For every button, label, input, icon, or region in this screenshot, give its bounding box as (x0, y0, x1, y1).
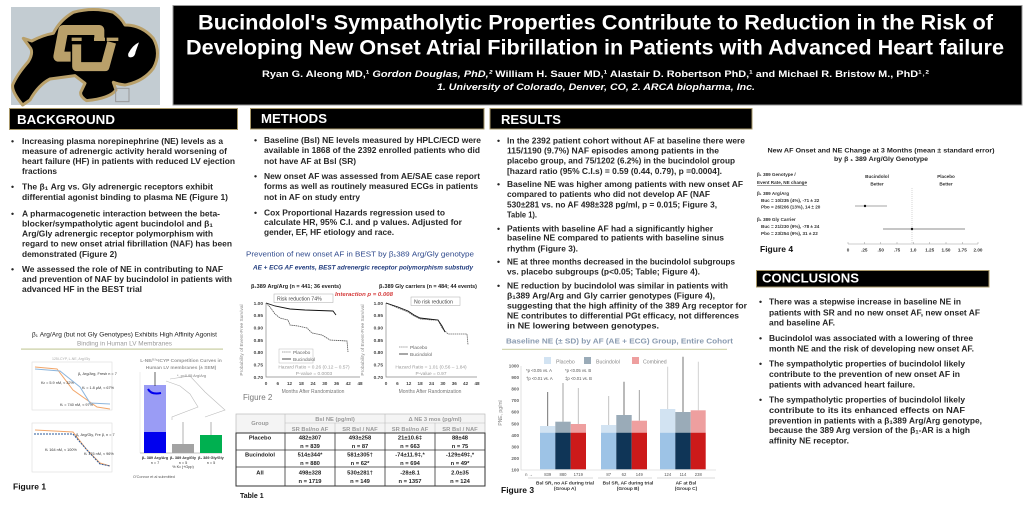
plot: Gly carriers survival: 1.00 (374, 301, 383, 307)
plot: Arg/Arg survival: 0 (265, 381, 268, 386)
plot: Gly carriers survival: Placebo (410, 345, 428, 351)
plot: Gly carriers survival: 36 (452, 381, 457, 386)
results bullets: • (497, 136, 500, 146)
plot: Arg/Arg survival: 36 (334, 381, 339, 386)
competition curve plot: upper: Kₗ = 740 nM, ≈ 97% (60, 403, 94, 407)
background bullets: • (11, 208, 14, 218)
table 1: 530±281† (347, 470, 373, 476)
panel: results (490, 108, 752, 331)
table 1: n = 149 (350, 479, 371, 485)
plot: Gly carriers survival: 6 (396, 381, 399, 386)
p-value notes: ‡p <0.01 vs. B (565, 376, 592, 381)
results bullets (497, 136, 748, 331)
high affinity bar chart (133, 358, 225, 479)
background bullets: Increasing plasma norepinephrine (NE) levels as a (22, 136, 223, 146)
background bullets: The β₁ Arg vs. Gly adrenergic receptors exhibit (22, 182, 213, 192)
results bullets: 115/1190 (9.7%) NAF episodes among patients in the (507, 146, 719, 156)
y axis (498, 364, 716, 472)
n row and group labels: 62 (622, 472, 627, 477)
plot: Gly carriers survival: 48 (474, 381, 480, 386)
results bullets: NE contributes to differential PGt efficacy, not differences (507, 311, 739, 321)
table 1 label: Table 1 (240, 493, 264, 500)
y axis: 100 (511, 468, 519, 472)
y axis: 400 (511, 433, 519, 438)
methods bullets: • (254, 208, 257, 218)
figure 4: forest plot (757, 148, 994, 252)
y axis: 200 (511, 456, 519, 461)
competition curve plot: upper: Kₕ = 5.9 nM, ≈ 32% (41, 381, 74, 385)
forest plot chart: 0 (847, 248, 850, 252)
results bullets: • (497, 223, 500, 233)
logo: CU buffalo (11, 7, 160, 105)
results bullets: 530±281 vs. no AF 498±328 pg/ml, p = 0.015; Figure 3, (507, 199, 717, 209)
results bullets: Patients with baseline AF had a significantly higher (507, 223, 714, 233)
y axis: PNE, pg/ml (498, 400, 504, 426)
forest plot labels: Better (939, 182, 953, 186)
group A bars (540, 422, 586, 469)
table 1: All (256, 470, 264, 476)
plot: Arg/Arg survival (239, 284, 363, 395)
plot: Arg/Arg survival: 0.90 (254, 326, 263, 332)
table 1: n = 694 (400, 461, 421, 467)
figure 3 legend: Combined (643, 360, 667, 366)
competition curve plot: lower: Kₗ 164 nM, ≈ 100% (45, 448, 77, 452)
background bullets: differential agonist binding to plasma NE (Figure 1) (22, 192, 228, 202)
plot: Arg/Arg survival: 1.00 (254, 301, 263, 307)
methods bullets: • (254, 135, 257, 145)
table 1: n = 1719 (298, 479, 322, 485)
conclusions bullets: The sympatholytic properties of bucindolol likely (769, 395, 965, 405)
y axis: 1000 (509, 364, 519, 368)
conclusions bullets: Bucindolol was associated with a lowering of three (769, 333, 973, 343)
forest plot labels: β₁ 389 Genotype / (757, 172, 796, 177)
high affinity bar chart: Human LV membranes (± SEM) (146, 365, 217, 371)
figure 2 title (246, 250, 474, 272)
figure 4 title (768, 148, 994, 163)
forest plot labels: Placebo (937, 174, 955, 179)
conclusions bullets: patients with SR and no new onset AF, new onset AF (769, 307, 980, 317)
table 1: 21±10.6‡ (398, 436, 422, 442)
n row and group labels (525, 472, 715, 492)
plot: Gly carriers survival: β₁389 Gly carriers (n = 484; 44 events) (379, 284, 477, 290)
background bullets: We assessed the role of NE in contributing to NAF (22, 264, 223, 274)
plot: Gly carriers survival: 0.90 (374, 326, 383, 332)
high affinity bar chart: β₁ 389 Arg/Arg (142, 456, 169, 460)
table 1: Δ NE 3 mos (pg/ml) (408, 417, 462, 423)
n row and group labels: Bsl SR, AF during trial (603, 480, 653, 486)
plot: Gly carriers survival: Hazard Ratio = 1.01 (0.56 – 1.84) (395, 364, 467, 370)
plot: Gly carriers survival: Probability of Event-Free Survival (360, 304, 366, 376)
high affinity bar chart: *, p<0.05 Arg/Arg (177, 374, 206, 378)
conclusions bullets: There was a stepwise increase in baseline NE in (769, 297, 961, 307)
figure 3: baseline NE bar chart (498, 336, 734, 492)
competition curve plot: upper (32, 357, 117, 410)
forest plot labels: Event Rate, NE change (757, 180, 807, 185)
p-value notes: †p <0.01 vs. A (526, 376, 553, 381)
forest plot chart: .50 (878, 248, 884, 252)
table 1 (236, 414, 485, 486)
plot: Arg/Arg survival: 0.80 (254, 350, 263, 356)
table 1: SR Bsl/no AF (292, 427, 329, 433)
plot: Gly carriers survival: 0.75 (374, 362, 383, 368)
forest plot chart: 1.75 (958, 248, 967, 252)
table 1: n = 49* (451, 461, 470, 467)
forest plot chart: .75 (894, 248, 901, 252)
background bullets: • (11, 264, 14, 274)
background bullets: A pharmacogenetic interaction between the beta- (22, 208, 220, 218)
figure 2: survival curves (239, 250, 480, 402)
table 1: 493±258 (349, 436, 372, 442)
results bullets: [hazard ratio (95% C.I.s) = 0.59 (0.44, 0.79), p =0.0004]. (507, 166, 722, 176)
background bullets: Arg/Gly adrenergic receptor polymorphism with (22, 228, 213, 238)
panel: methods (250, 108, 484, 237)
n row and group labels: (Group A) (554, 486, 577, 492)
plot: Arg/Arg survival: 0.75 (254, 362, 263, 368)
heading: results (490, 108, 752, 129)
table 1: 581±305† (347, 452, 373, 458)
competition curve plot: lower: Kₗ 176 nM, ≈ 96% (84, 452, 114, 456)
forest plot chart: 1.50 (942, 248, 951, 252)
plot: Gly carriers survival: 0.70 (374, 375, 383, 381)
forest plot chart: 1.25 (925, 248, 935, 252)
heading: conclusions: CONCLUSIONS (762, 270, 859, 286)
table 1: n = 62* (351, 461, 370, 467)
figure 3 title: Baseline NE (± SD) by AF (AE + ECG) Group, Entire Cohort (506, 336, 734, 346)
results bullets: NE reduction by bucindolol was similar in patients with (507, 281, 728, 291)
table 1: SR Bsl / NAF (442, 427, 478, 433)
plot: Arg/Arg survival: Risk reduction 74% (277, 296, 322, 302)
forest plot labels (757, 172, 955, 236)
methods bullets: not have AF at Bsl (SR) (264, 156, 356, 166)
plot: Gly carriers survival: 18 (418, 381, 423, 386)
background bullets: and prevention of NAF by bucindolol in patients with (22, 274, 232, 284)
table 1: Bsl NE (pg/ml) (315, 417, 355, 423)
figure 1 title: Binding in Human LV Membranes (77, 340, 173, 348)
y axis: 500 (511, 421, 519, 426)
forest plot chart (847, 188, 983, 252)
n row and group labels: 124 (664, 472, 672, 477)
plot: Arg/Arg survival: Probability of Event-Free Survival (239, 304, 245, 376)
plot: Arg/Arg survival: 0.95 (254, 313, 263, 319)
plot: Arg/Arg survival: P-value = 0.0003 (296, 371, 333, 377)
results bullets: in NE lowering between genotypes. (507, 321, 659, 331)
error bars (548, 357, 698, 426)
forest plot chart: 2.00 (974, 248, 983, 252)
plot: Gly carriers survival (360, 284, 480, 395)
y axis: 600 (511, 410, 519, 415)
plot: Gly carriers survival: 12 (406, 381, 412, 386)
table 1: Placebo (249, 436, 272, 442)
results bullets: compared to patients who did not develop AF (NAF (507, 189, 710, 199)
authors: Ryan G. Aleong MD,¹ Gordon Douglas, PhD,² William H. Sauer MD,¹ Alastair D. Robertson PhD,¹ and Michael R. Bristow M., PhD¹˒² (262, 69, 929, 80)
forest plot labels: Buc = 21/230 (9%), -78 ± 24 (761, 224, 820, 229)
n row and group labels: 114 (680, 472, 687, 477)
plot: Arg/Arg survival: Bucindolol (293, 357, 315, 363)
figure 1 title: β₁ Arg/Arg (but not Gly Genotypes) Exhibits High Affinity Agonist (32, 332, 217, 338)
methods bullets: gender, EF, HF etiology and race. (264, 227, 394, 237)
conclusions bullets: • (759, 359, 762, 369)
n row and group labels: Bsl SR, no AF during trial (536, 480, 594, 486)
plot: Gly carriers survival: 42 (463, 381, 469, 386)
figure 1 label: Figure 1 (13, 482, 46, 492)
affiliations: 1. University of Colorado, Denver, CO, 2. ARCA biopharma, Inc. (437, 82, 755, 93)
forest plot labels: Buc = 10/235 (4%), -71 ± 22 (761, 198, 820, 203)
title banner (173, 6, 1022, 105)
conclusions bullets: • (759, 395, 762, 405)
competition curve plot: lower (32, 423, 115, 472)
results bullets: • (497, 179, 500, 189)
plot: Arg/Arg survival: Placebo (293, 350, 311, 356)
heading: background: BACKGROUND (17, 112, 115, 127)
figure 3 legend: Placebo (556, 360, 575, 366)
y axis: 900 (511, 375, 519, 380)
n row and group labels: 839 (544, 472, 552, 477)
background bullets: measure of adrenergic activity herald worsening of (22, 146, 227, 156)
n row and group labels: 87 (606, 472, 612, 477)
competition curve plot: upper: β₁ Arg/Arg, Fresh n = 7 (78, 372, 117, 376)
heading: conclusions (756, 270, 989, 287)
forest plot labels: Pbo = 26/206 (13%), 14 ± 20 (761, 204, 821, 210)
plot: Arg/Arg survival: 24 (310, 381, 316, 386)
table 1: n = 75 (452, 444, 469, 450)
table 1: n = 839 (300, 444, 321, 450)
plot: Gly carriers survival: Months After Randomization (399, 389, 462, 395)
y axis: 300 (511, 444, 519, 449)
conclusions bullets: • (759, 333, 762, 343)
results bullets: baseline NE compared to patients with baseline sinus (507, 233, 724, 243)
table 1: -74±11.9‡,* (395, 452, 426, 458)
methods bullets: not in AF on study entry (264, 192, 360, 202)
methods bullets: available in 1868 of the 2392 enrolled patients who did (264, 145, 480, 155)
forest plot labels: Bucindolol (865, 174, 889, 179)
results bullets: Baseline NE was higher among patients with new onset AF (507, 179, 743, 189)
results bullets: NE at three months decreased in the bucindolol subgroups (507, 257, 735, 267)
methods bullets (254, 135, 481, 237)
plot: Arg/Arg survival: Months After Randomization (282, 389, 345, 395)
high affinity bar chart: n = 5 (207, 461, 215, 465)
heading: methods (250, 108, 484, 129)
n row and group labels: 1719 (574, 472, 584, 477)
table 1: n = 663 (400, 444, 421, 450)
results bullets: Table 1). (507, 209, 537, 219)
plot: Arg/Arg survival: 42 (346, 381, 351, 386)
table 1: Group (251, 421, 269, 427)
conclusions bullets: patients with advanced heart failure. (769, 379, 915, 389)
conclusions bullets (759, 297, 982, 445)
background bullets: blocker/sympatholytic agent bucindolol and β₁ (22, 218, 213, 228)
methods bullets: forms as well as routinely measured ECGs in patients (264, 181, 478, 191)
methods bullets: New onset AF was assessed from AE/SAE case report (264, 171, 480, 181)
plot: Arg/Arg survival: 30 (322, 381, 328, 386)
results bullets: suggesting that the high affinity of the 389 Arg receptor for (507, 301, 748, 311)
high affinity bar chart: L-NE/¹²⁵ICYP Competition Curves in (140, 358, 222, 364)
background bullets: heart failure (HF) in patients with reduced LV ejection (22, 156, 235, 166)
plot: Gly carriers survival: 24 (429, 381, 434, 386)
results bullets: β₁389 Arg/Arg and Gly carrier genotypes (Figure 4), (507, 291, 715, 301)
background bullets (11, 136, 235, 294)
forest plot chart: .25 (861, 248, 868, 252)
heading: methods: METHODS (261, 111, 327, 126)
methods bullets: Cox Proportional Hazards regression used to (264, 208, 445, 218)
conclusions bullets: month NE and the risk of developing new onset AF. (769, 343, 974, 353)
table 1: 482±307 (299, 436, 321, 442)
plot: Gly carriers survival: 0 (385, 381, 388, 386)
plot: Arg/Arg survival: 12 (287, 381, 292, 386)
title: Bucindolol's Sympatholytic Properties Contribute to Reduction in the Risk of (198, 12, 994, 34)
methods bullets: Baseline (Bsl) NE levels measured by HPLC/ECD were (264, 135, 481, 145)
table 1: n = 124 (450, 479, 471, 485)
conclusions bullets: affinity NE receptor. (769, 435, 849, 445)
conclusions bullets: because the 389 Arg version of the β₁-AR is a high (769, 425, 970, 435)
n row and group labels: 880 (560, 472, 567, 477)
plot: Gly carriers survival: 30 (440, 381, 446, 386)
high affinity bar chart: n = 7 (151, 461, 159, 465)
table 1: 88±48 (452, 436, 469, 442)
y axis: 800 (511, 386, 519, 392)
n row and group labels: n → (525, 472, 533, 477)
results bullets: rhythm (Figure 3). (507, 243, 578, 253)
conclusions bullets: contribute to the prevention of new onset AF in (769, 369, 960, 379)
competition curve plot: upper: 125I-CYP, L-NE, Arg/Gly (52, 357, 90, 361)
competition curve plot: upper: Kₗ = 1.8 μM, ≈ 67% (82, 386, 115, 390)
forest plot labels: β₁ 389 Arg/Arg (757, 191, 789, 196)
forest plot labels: Better (870, 182, 884, 186)
n row and group labels: 149 (636, 472, 643, 477)
figure 3 label: Figure 3 (501, 485, 534, 495)
conclusions bullets: and baseline AF. (769, 318, 835, 328)
high affinity bar chart: β₁ 389 Arg/Gly (170, 456, 197, 460)
p-value notes: *p <0.05 vs. A (526, 368, 552, 373)
conclusions bullets: The sympatholytic properties of bucindolol likely (769, 359, 965, 369)
table 1: n = 880 (300, 461, 320, 467)
figure 1 (21, 332, 225, 479)
background bullets: • (11, 182, 14, 192)
plot: Arg/Arg survival: 48 (357, 381, 363, 386)
results bullets: vs. placebo subgroups (p<0.05; Table; Figure 4). (507, 267, 700, 277)
heading: background (10, 108, 238, 130)
plot: Gly carriers survival: P-value = 0.97 (415, 371, 447, 377)
table 1: 498±328 (299, 470, 322, 476)
results bullets: placebo group, and 75/1202 (6.2%) in the bucindolol group (507, 156, 735, 166)
background bullets: advanced HF in the BEST trial (22, 284, 142, 294)
n row and group labels: (Group B) (617, 486, 640, 492)
figure 3 legend (544, 357, 667, 366)
plot: Arg/Arg survival: 6 (277, 381, 280, 386)
background bullets: • (11, 136, 14, 146)
figure 2 label: Figure 2 (243, 393, 273, 402)
panel: conclusions (756, 270, 989, 445)
title: Developing New Onset Atrial Fibrillation in Patients with Advanced Heart failure (186, 36, 1004, 60)
competition curve plot: lower: β₁ Arg/Gly, Fre β, n = 7 (76, 433, 115, 437)
table 1: SR Bsl/no AF (392, 427, 429, 433)
results bullets: In the 2392 patient cohort without AF at baseline there were (507, 136, 745, 146)
table 1: n = 87 (352, 444, 368, 450)
n row and group labels: 238 (695, 472, 702, 477)
methods bullets: calculate HR, 95% C.I. and p values. Adjusted for (264, 217, 463, 227)
forest plot labels: β₁ 389 Gly Carrier (757, 217, 796, 222)
table 1: n = 1357 (398, 479, 422, 485)
interaction p value: Interaction p = 0.008 (335, 292, 394, 298)
figure 1 title (21, 332, 223, 350)
plot: Gly carriers survival: Bucindolol (410, 352, 432, 358)
plot: Gly carriers survival: 0.85 (374, 338, 383, 344)
figure 3 legend: Bucindolol (596, 360, 620, 366)
figure 4 title: by β ₁ 389 Arg/Gly Genotype (834, 156, 928, 163)
high affinity bar chart: O'Connor et al submitted (133, 475, 175, 479)
high affinity bar chart: % Kₕ (+Gpp) (172, 465, 194, 469)
table 1: Bucindolol (245, 452, 275, 458)
group B bars (601, 415, 647, 469)
heading: results: RESULTS (501, 112, 561, 127)
conclusions bullets: prevention in patients with a β₁389 Arg/Arg genotype, (769, 416, 982, 426)
background bullets: demonstrated (Figure 2) (22, 249, 117, 259)
panel: background (10, 108, 238, 294)
plot: Arg/Arg survival: 0.70 (254, 375, 263, 381)
title (186, 12, 1004, 60)
forest plot labels: Pbo = 23/254 (9%), 31 ± 22 (761, 231, 818, 236)
n row and group labels: (Group C) (675, 486, 698, 492)
background bullets: regard to new onset atrial fibrillation (NAF) has been (22, 238, 232, 248)
background bullets: fractions (22, 166, 57, 176)
plot: Arg/Arg survival: 18 (299, 381, 304, 386)
results bullets: • (497, 281, 500, 291)
n row and group labels: AF at Bsl (676, 480, 696, 486)
forest plot chart: 1.0 (910, 248, 917, 252)
plot: Arg/Arg survival: β₁389 Arg/Arg (n = 441; 36 events) (251, 284, 341, 290)
p-value notes: *p <0.05 vs. B (565, 368, 591, 373)
plot: Arg/Arg survival: Hazard Ratio = 0.26 (0.12 – 0.57) (278, 364, 350, 370)
plot: Arg/Arg survival: 0.85 (254, 338, 263, 344)
methods bullets: • (254, 171, 257, 181)
figure 2 title: Prevention of new onset AF in BEST by β₁389 Arg/Gly genotype (246, 250, 474, 258)
high affinity bar chart: n = 5 (179, 461, 187, 465)
table 1: -129±49‡,* (446, 452, 475, 458)
table 1: 2.0±35 (451, 470, 470, 476)
plot: Gly carriers survival: 0.80 (374, 350, 383, 356)
conclusions bullets: contribute to its its enhanced effects on NAF (769, 405, 965, 415)
figure 2 title: AE + ECG AF events, BEST adrenergic receptor polymorphism substudy (252, 264, 473, 272)
plot: Gly carriers survival: No risk reduction (414, 300, 453, 306)
table 1: SR Bsl / NAF (342, 427, 378, 433)
conclusions bullets: • (759, 297, 762, 307)
plot: Gly carriers survival: 0.95 (374, 313, 383, 319)
group C bars (660, 409, 706, 469)
table 1: 514±344* (298, 452, 323, 458)
figure 4 label: Figure 4 (760, 244, 793, 254)
p-value notes (526, 368, 592, 381)
figure 4 title: New AF Onset and NE Change at 3 Months (mean ± standard error) (768, 148, 994, 154)
table 1: -28±8.1 (400, 470, 421, 476)
high affinity bar chart: β₁ 389 Gly/Gly (198, 456, 225, 460)
y axis: 700 (511, 398, 519, 403)
results bullets: • (497, 257, 500, 267)
